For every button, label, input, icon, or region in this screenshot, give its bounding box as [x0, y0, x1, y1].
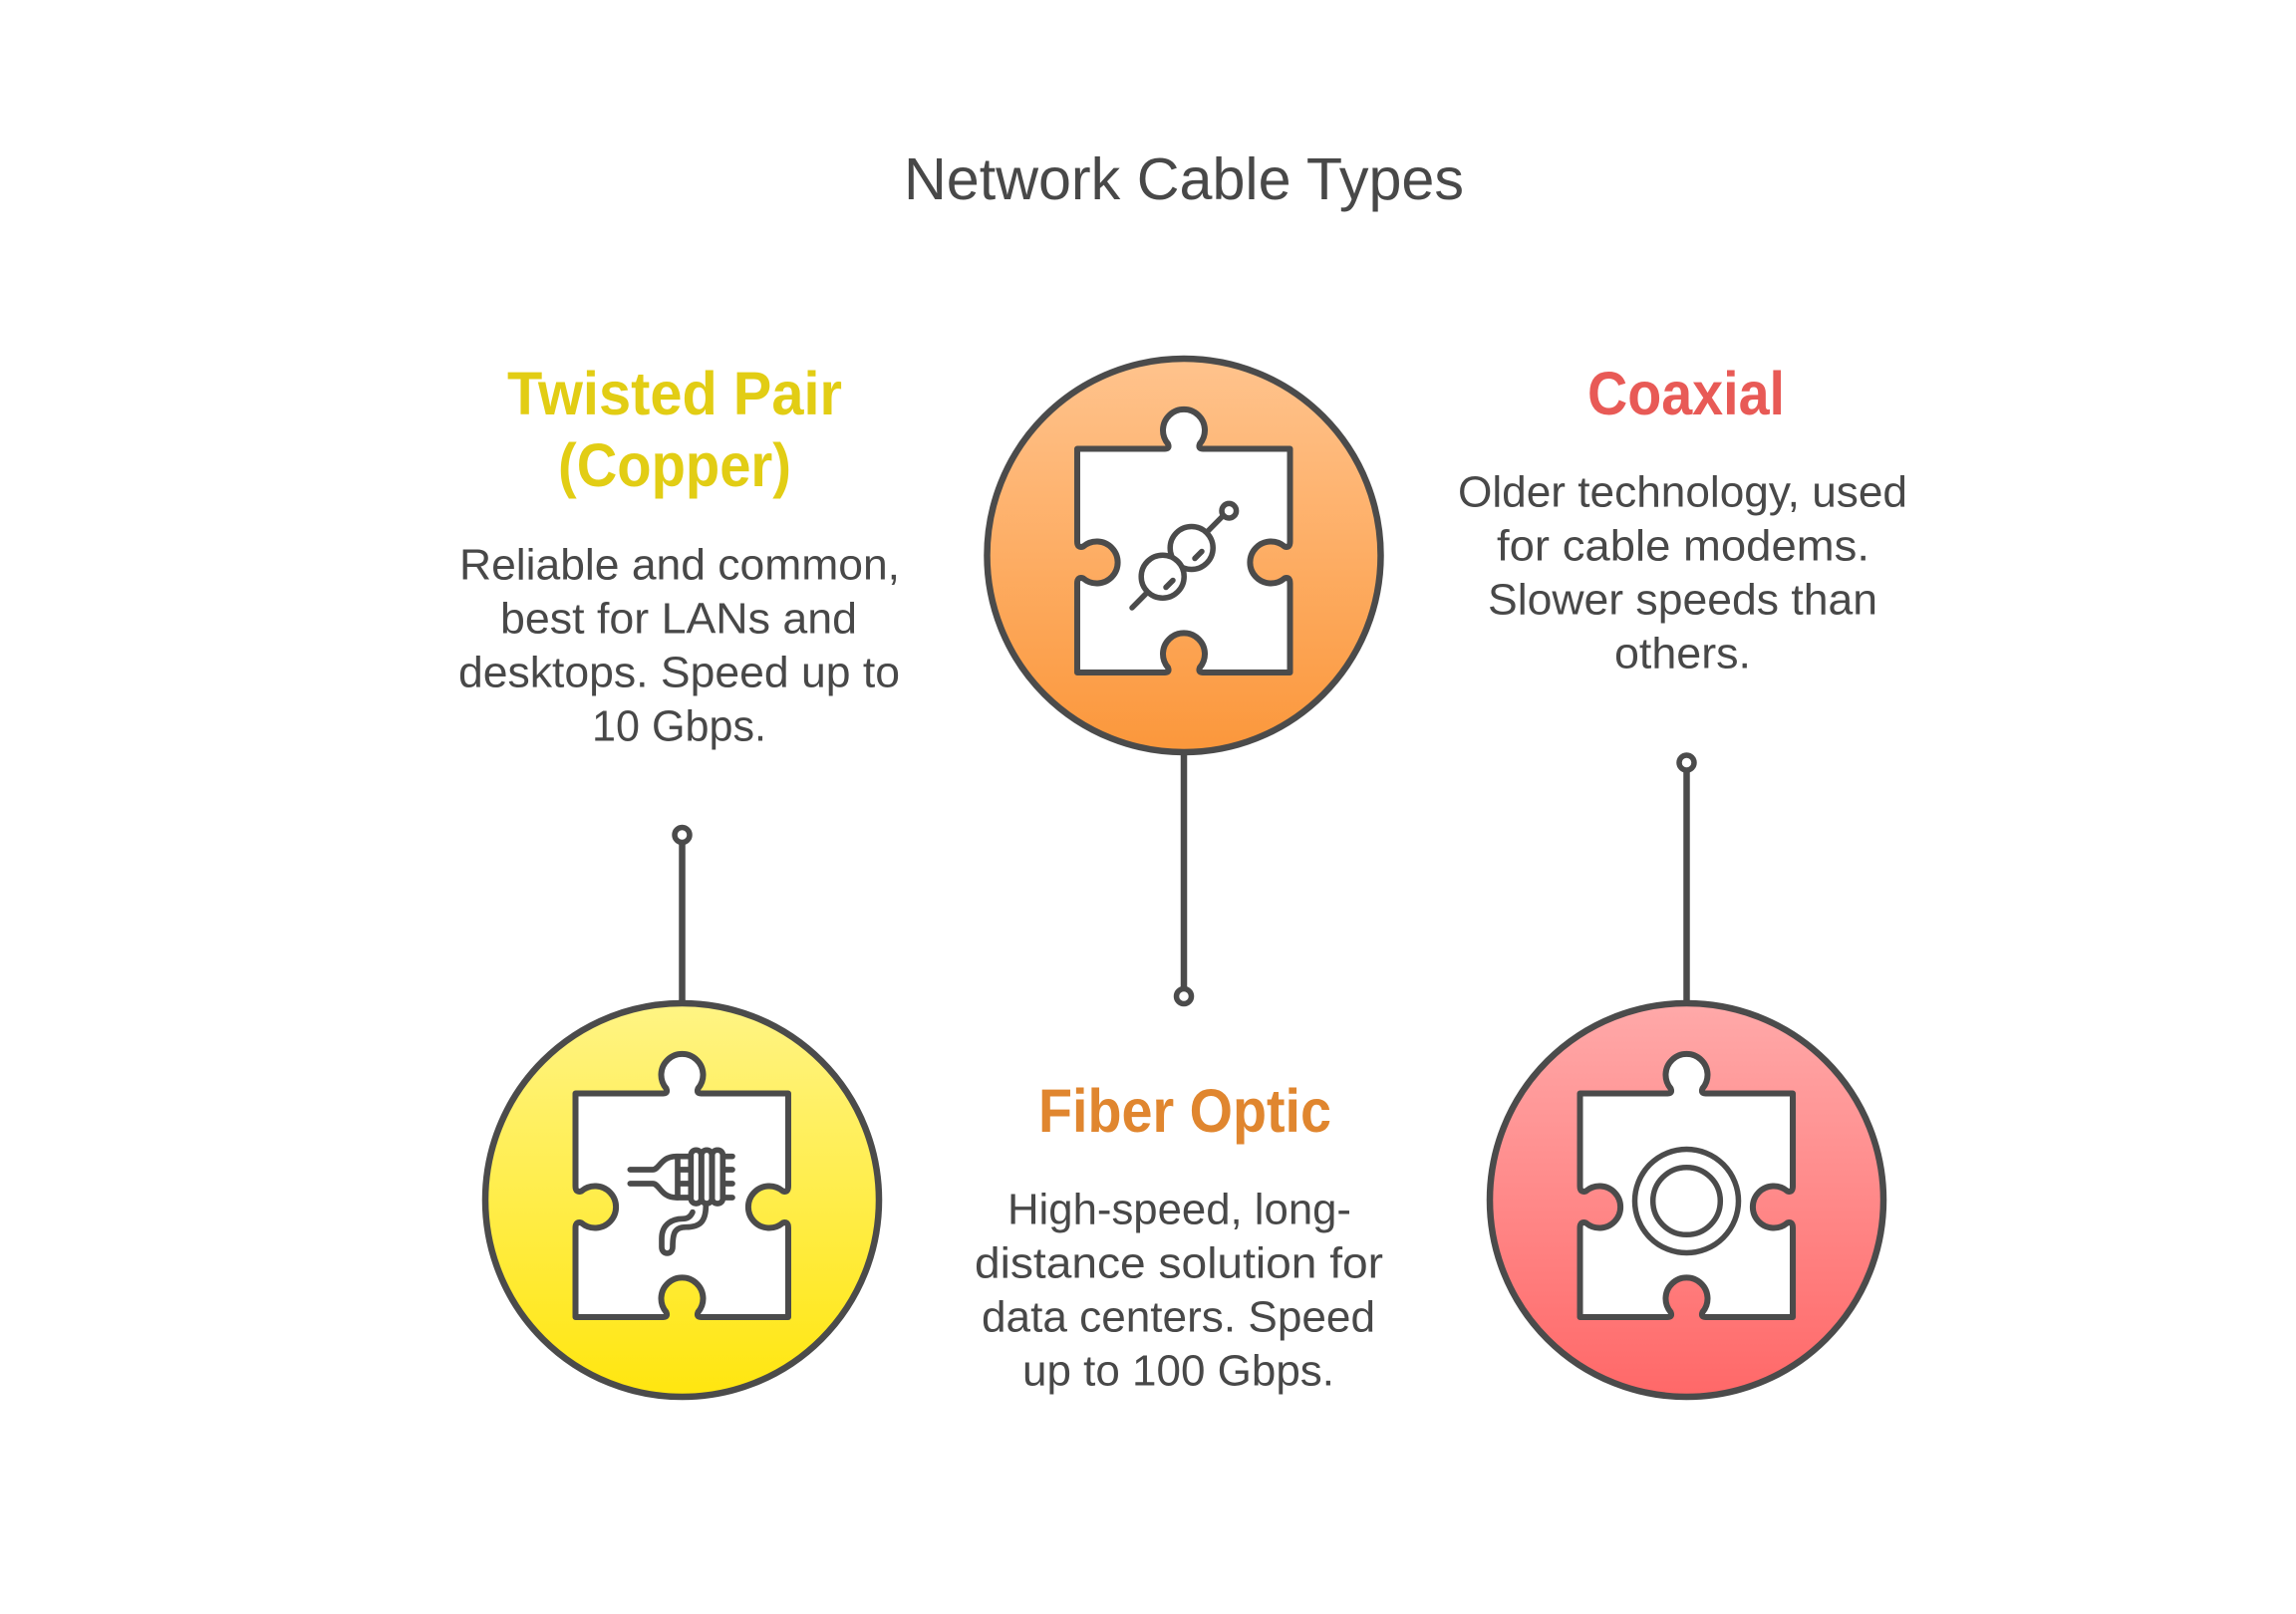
connector: fiber optic: [1176, 755, 1192, 1004]
puzzle piece: twisted pair: [576, 1054, 788, 1317]
text block: coaxial description: Older technology, used: [1458, 468, 1907, 516]
text block: twisted pair description: best for LANs and: [500, 594, 857, 644]
circle badge: coaxial: [1490, 1003, 1883, 1397]
text block: fiber optic description: High-speed, long-: [1007, 1186, 1351, 1233]
title: Network Cable Types: [904, 146, 1464, 212]
text block: twisted pair description: [458, 540, 900, 751]
text block: coaxial description: others.: [1614, 630, 1751, 677]
puzzle piece: fiber optic: [1077, 409, 1290, 672]
heading: twisted pair: (Copper): [558, 431, 791, 499]
text block: coaxial description: Slower speeds than: [1488, 576, 1877, 624]
text block: fiber optic description: [975, 1186, 1383, 1395]
connector: coaxial: [1679, 755, 1694, 1002]
text block: fiber optic description: distance solution for: [975, 1239, 1383, 1287]
text block: fiber optic description: data centers. Speed: [982, 1293, 1375, 1341]
text block: fiber optic description: up to 100 Gbps.: [1022, 1347, 1334, 1395]
text block: twisted pair description: desktops. Speed up to: [458, 648, 900, 697]
heading: coaxial: Coaxial: [1587, 360, 1785, 427]
connector: twisted pair: [675, 827, 690, 1002]
text block: twisted pair description: 10 Gbps.: [592, 701, 766, 751]
icon: coaxial cable cross-section: [1634, 1150, 1738, 1253]
panel: twisted pair: [458, 360, 900, 1397]
text block: coaxial description: for cable modems.: [1497, 522, 1869, 570]
icon: cable on fork: [630, 1150, 732, 1253]
puzzle piece: coaxial: [1580, 1054, 1793, 1317]
icon: fiber strand beads: [1132, 503, 1237, 608]
heading: twisted pair: Twisted Pair: [507, 360, 842, 427]
panel: fiber optic: [975, 359, 1383, 1395]
circle badge: fiber optic: [987, 359, 1381, 752]
heading: fiber optic: Fiber Optic: [1038, 1077, 1331, 1145]
text block: coaxial description: [1458, 468, 1907, 677]
circle badge: twisted pair: [485, 1003, 879, 1397]
text block: twisted pair description: Reliable and common,: [459, 540, 900, 590]
panel: coaxial: [1458, 360, 1907, 1397]
heading: twisted pair: [507, 360, 842, 499]
